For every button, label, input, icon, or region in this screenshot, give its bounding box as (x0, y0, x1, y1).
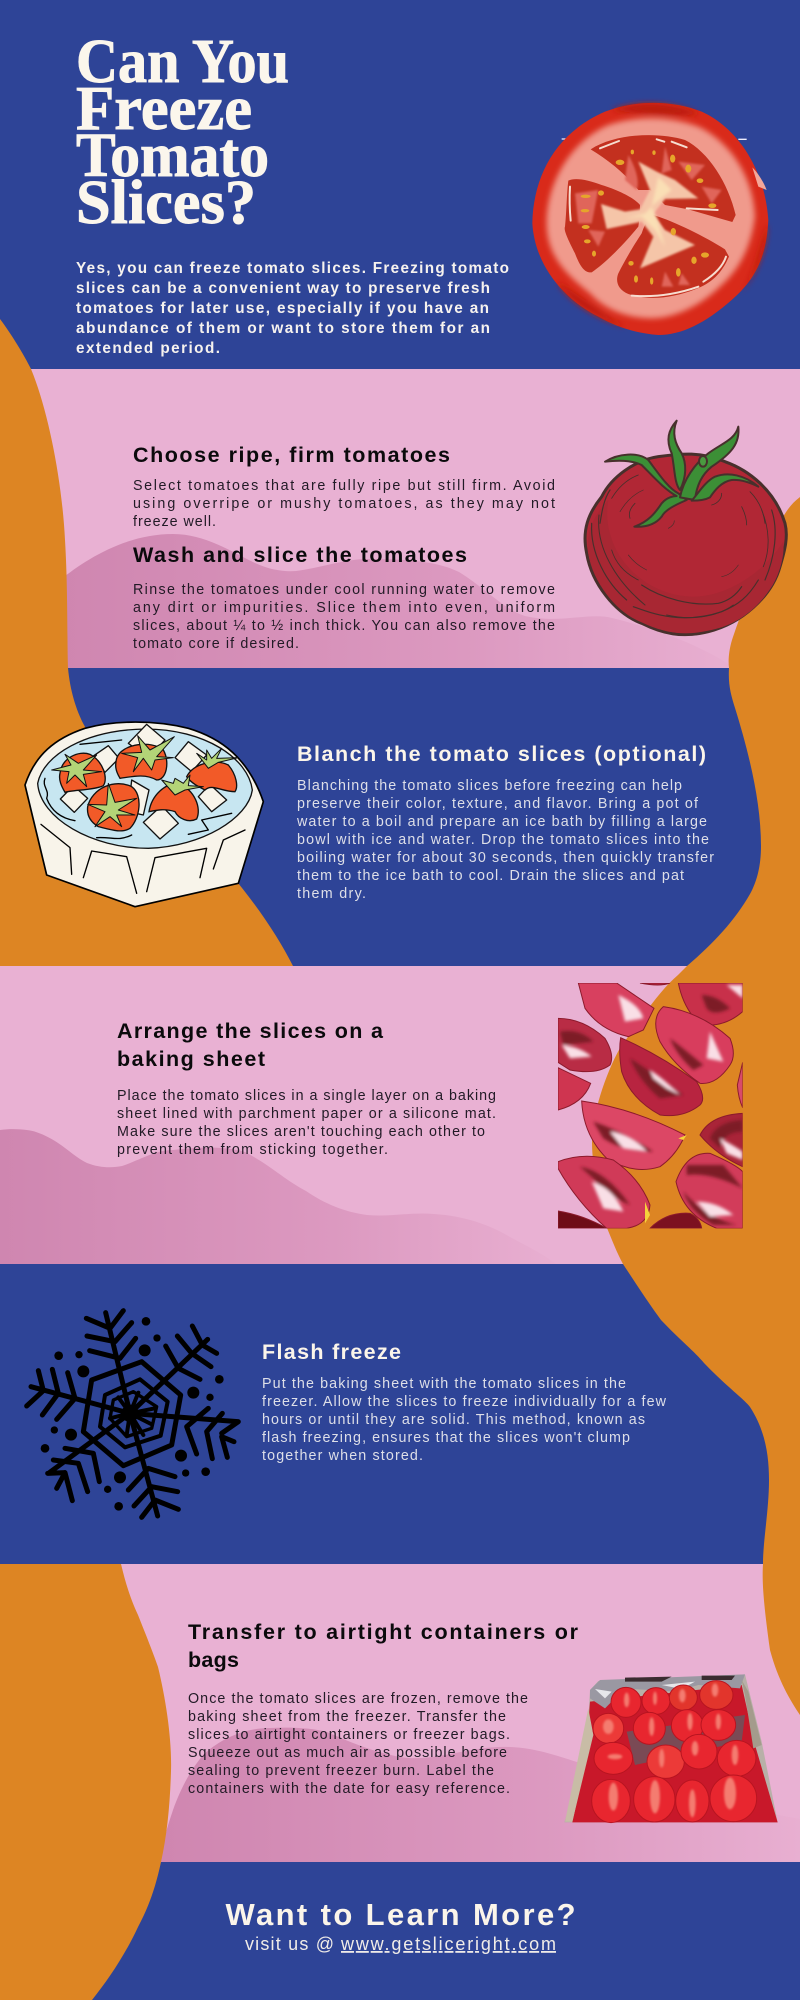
blob: lower left orange (0, 1564, 171, 2000)
blob: right orange (592, 497, 800, 1715)
text: blanch body: Blanching the tomato slices before freezing can help (297, 778, 682, 794)
wave: band two (60, 534, 735, 668)
text: wash body (133, 582, 555, 652)
intro text: tomatoes for later use, especially if you have an (76, 300, 489, 317)
background: pink band transfer (0, 1564, 800, 1862)
intro text (76, 260, 509, 357)
text: wash body: Rinse the tomatoes under cool running water to remove (133, 582, 555, 598)
text: transfer body: Once the tomato slices are frozen, remove the (188, 1691, 528, 1707)
text: blanch body: boiling water for about 30 seconds, then quickly transfer (297, 850, 714, 866)
image: watercolor tomato slice (532, 103, 768, 335)
text: choose ripe body (133, 478, 555, 530)
blob: upper left orange (0, 319, 293, 966)
icon: illustrated tomato (585, 421, 786, 635)
text: blanch body: preserve their color, texture, and flavor. Bring a pot of (297, 796, 698, 812)
arm lower left (48, 1413, 130, 1501)
panel: choose and wash text (133, 443, 555, 652)
image: tomato wedges photo (558, 983, 743, 1228)
heading: choose ripe: Choose ripe, firm tomatoes (133, 443, 450, 467)
intro text: slices can be a convenient way to preserve fresh (76, 280, 490, 297)
center spokes (110, 1393, 155, 1435)
tomato halves (592, 1681, 757, 1823)
text: blanch body: water to a boil and prepare an ice bath by filling a large (296, 814, 707, 830)
text: wash body: any dirt or impurities. Slice them into even, uniform (133, 600, 555, 616)
tomatoes (60, 744, 237, 831)
heading: arrange: Arrange the slices on a (117, 1019, 384, 1043)
text: flash freeze body: flash freezing, ensures that the slices won't clump (262, 1430, 630, 1446)
panel: blanch text (296, 742, 714, 902)
heading: want to learn more: Want to Learn More? (226, 1897, 576, 1932)
text: flash freeze body (262, 1376, 667, 1464)
stem and leaves (605, 421, 758, 527)
background: blue footer band (0, 1862, 800, 2000)
text: wash body: tomato core if desired. (133, 636, 299, 652)
wedge bright tips (645, 1135, 687, 1223)
text: blanch body (296, 778, 714, 902)
image: bowl of tomatoes and ice (25, 722, 263, 907)
text: transfer body (188, 1691, 528, 1797)
seed chamber left (565, 179, 640, 272)
heading: arrange: baking sheet (117, 1047, 265, 1071)
text: choose ripe body: Select tomatoes that are fully ripe but still firm. Avoid (133, 478, 555, 494)
heading: blanch: Blanch the tomato slices (optional) (297, 742, 706, 766)
water lines and rim details (41, 740, 245, 893)
wave: band four (0, 1129, 556, 1264)
intro text: extended period. (76, 340, 220, 357)
ice cubes (60, 724, 227, 839)
seed chamber top right (591, 135, 736, 222)
wedge interior shading (560, 985, 743, 1225)
text: arrange body: Place the tomato slices in a single layer on a baking (117, 1088, 496, 1104)
image: tray of frozen tomato halves (564, 1674, 778, 1823)
text: arrange body: prevent them from sticking together. (117, 1142, 388, 1158)
text: transfer body: containers with the date for easy reference. (188, 1781, 510, 1797)
heading: transfer (188, 1620, 579, 1672)
wave: band six (160, 1728, 800, 1862)
heading: transfer: bags (188, 1648, 239, 1672)
arm upper right (130, 1326, 217, 1413)
heading: transfer: Transfer to airtight containers or (188, 1620, 579, 1644)
title: Freeze (76, 75, 252, 143)
text: transfer body: Squeeze out as much air as possible before (188, 1745, 507, 1761)
tomato halves pale centres (603, 1683, 738, 1817)
white membrane highlights (570, 139, 726, 296)
title: Slices? (76, 169, 256, 237)
text: blanch body: them to the ice bath to cool. Drain the slices and pat (297, 868, 684, 884)
text: choose ripe body: using overripe or mushy tomatoes, as they may not (133, 496, 555, 512)
title (76, 28, 289, 237)
title: Can You (76, 28, 289, 96)
text: arrange body (117, 1088, 496, 1158)
background: pink band arrange (0, 966, 800, 1264)
link: website: www.getsliceright.com (340, 1934, 556, 1954)
background: pink band choose and wash (0, 369, 800, 668)
heading: flash freeze: Flash freeze (262, 1340, 401, 1364)
seed chamber bottom (617, 215, 729, 298)
arm down (128, 1413, 178, 1517)
text: blanch body: them dry. (297, 886, 366, 902)
text: flash freeze body: together when stored. (262, 1448, 423, 1464)
tomato calyx stars (52, 736, 238, 827)
text: arrange body: sheet lined with parchment paper or a silicone mat. (117, 1106, 496, 1122)
text: transfer body: slices to airtight containers or freezer bags. (188, 1727, 510, 1743)
icon: snowflake (27, 1311, 238, 1517)
intro text: abundance of them or want to store them for an (76, 320, 490, 337)
heading: wash and slice: Wash and slice the tomatoes (133, 543, 467, 567)
snowflake dots (41, 1317, 224, 1511)
text: arrange body: Make sure the slices aren't touching each other to (117, 1124, 485, 1140)
text: visit us: visit us @ (245, 1934, 334, 1954)
title: Tomato (76, 122, 269, 190)
inner hexagons (83, 1362, 181, 1466)
background: blue band blanch (0, 668, 800, 966)
text: wash body: slices, about ¼ to ½ inch thick. You can also remove the (133, 618, 555, 634)
text: transfer body: sealing to prevent freezer burn. Label the (188, 1763, 494, 1779)
panel: arrange text (117, 1019, 496, 1158)
seeds (581, 150, 716, 285)
background: blue intro band (0, 0, 800, 369)
arm right (130, 1408, 238, 1459)
footer call to action (226, 1897, 576, 1954)
text: blanch body: bowl with ice and water. Drop the tomato slices into the (297, 832, 709, 848)
text: flash freeze body: freezer. Allow the slices to freeze individually for a few (262, 1394, 667, 1410)
text: choose ripe body: freeze well. (133, 514, 216, 530)
panel: transfer text (188, 1620, 579, 1797)
intro text: Yes, you can freeze tomato slices. Freezing tomato (76, 260, 509, 277)
text: flash freeze body: hours or until they are solid. This method, known as (262, 1412, 645, 1428)
slice center (601, 162, 698, 268)
text: transfer body: baking sheet from the freezer. Transfer the (188, 1709, 506, 1725)
heading: arrange (117, 1019, 384, 1071)
arm up (86, 1311, 136, 1413)
panel: flash freeze text (262, 1340, 667, 1464)
arm left (27, 1369, 130, 1419)
background: blue band flash freeze (0, 1264, 800, 1564)
text: flash freeze body: Put the baking sheet with the tomato slices in the (262, 1376, 626, 1392)
